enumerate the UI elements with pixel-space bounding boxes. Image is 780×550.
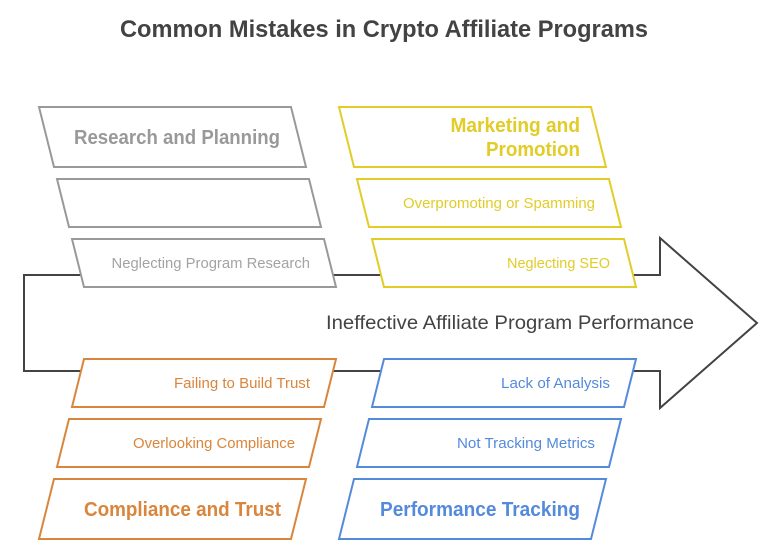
item: not tracking metrics (357, 419, 621, 467)
empty item box (57, 179, 321, 227)
header: performance tracking (339, 479, 606, 539)
panel: marketing and promotion (339, 107, 636, 287)
item: failing to build trust (72, 359, 336, 407)
item: not tracking metrics: Not Tracking Metrics (457, 435, 595, 452)
item: overpromoting or spamming: Overpromoting or Spamming (403, 195, 595, 212)
panel: compliance and trust (39, 359, 336, 539)
item: overlooking compliance: Overlooking Compliance (133, 435, 295, 452)
panel: research and planning (39, 107, 336, 287)
arrow: fishbone spine pointing to the outcome (24, 238, 757, 408)
header: compliance and trust: Compliance and Trust (84, 498, 281, 521)
header: research and planning: Research and Planning (74, 126, 280, 149)
header: compliance and trust (39, 479, 306, 539)
title: Common Mistakes in Crypto Affiliate Programs (120, 16, 648, 43)
item: neglecting program research (72, 239, 336, 287)
item: lack of analysis: Lack of Analysis (501, 375, 610, 392)
item: overlooking compliance (57, 419, 321, 467)
panel: performance tracking (339, 359, 636, 539)
item: neglecting seo (372, 239, 636, 287)
outcome label: Ineffective Affiliate Program Performance (326, 312, 694, 334)
item: neglecting program research: Neglecting Program Research (112, 255, 310, 272)
item: failing to build trust: Failing to Build Trust (174, 375, 311, 392)
item: overpromoting or spamming (357, 179, 621, 227)
header: marketing and promotion: Marketing and (450, 114, 580, 137)
header: marketing and promotion (339, 107, 606, 167)
item: lack of analysis (372, 359, 636, 407)
header: marketing and promotion: Promotion (486, 138, 580, 161)
item: neglecting seo: Neglecting SEO (507, 255, 610, 272)
header: performance tracking: Performance Tracking (380, 498, 580, 521)
header: research and planning (39, 107, 306, 167)
